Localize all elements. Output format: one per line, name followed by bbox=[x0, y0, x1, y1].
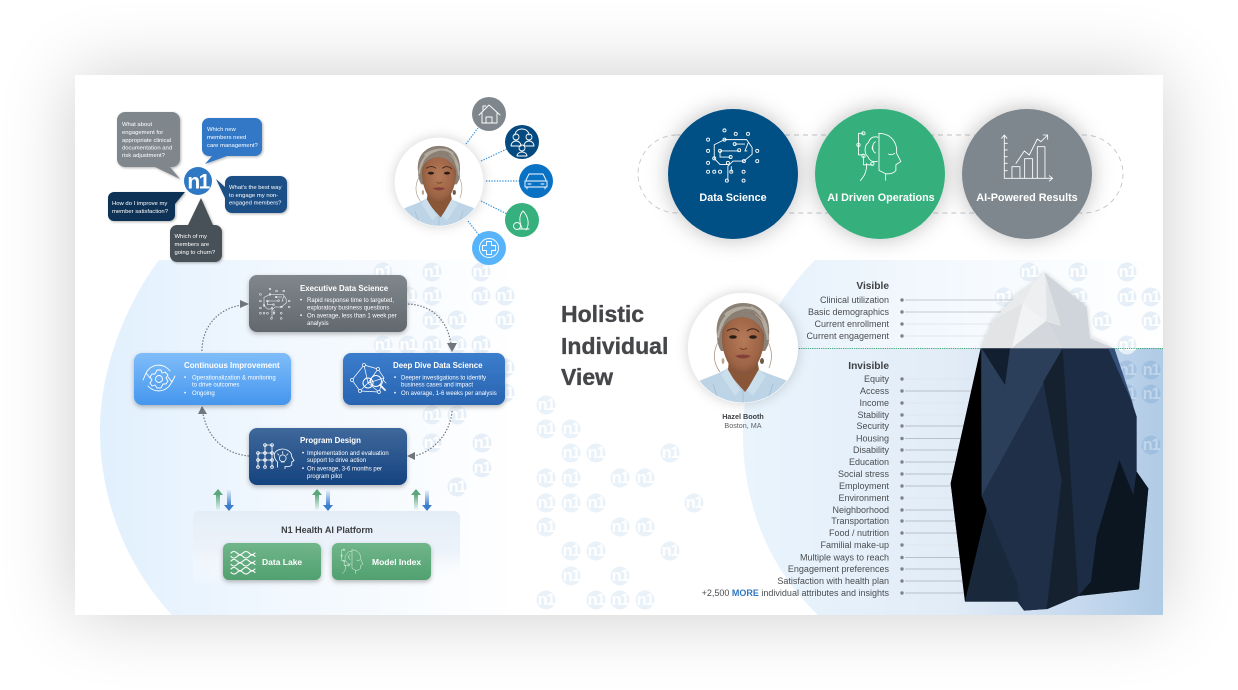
watermark logos: n1 bbox=[424, 287, 441, 305]
pillar: ai driven operations bbox=[815, 109, 945, 239]
watermark logos: n1 bbox=[563, 542, 580, 560]
watermark logos: n1 bbox=[497, 311, 514, 329]
right panel background: circle above the waterline bbox=[758, 260, 1163, 348]
invisible attributes list: Neighborhood bbox=[832, 505, 889, 515]
watermark logos: n1 bbox=[1070, 288, 1087, 306]
watermark logos: n1 bbox=[588, 494, 605, 512]
watermark logos: n1 bbox=[1094, 312, 1111, 330]
bubble: churn bbox=[170, 198, 222, 262]
watermark logos: n1 bbox=[612, 469, 629, 487]
card: deep dive data science: On average, 1-6 weeks per analysis bbox=[401, 391, 497, 397]
watermark logos: n1 bbox=[637, 591, 654, 609]
watermark logos: n1 bbox=[538, 518, 555, 536]
pillar: ai-powered results: AI-Powered Results bbox=[976, 192, 1078, 204]
invisible attributes list: Environment bbox=[838, 493, 889, 503]
bubble: clinical documentation: What about bbox=[122, 122, 152, 128]
large portrait: hazel booth bbox=[688, 293, 798, 430]
visible attributes list: Current engagement bbox=[806, 331, 889, 341]
n1 health ai platform panel: N1 Health AI Platform bbox=[281, 525, 373, 535]
bubble: member satisfaction bbox=[108, 192, 185, 221]
card: deep dive data science: business cases and impact bbox=[401, 382, 473, 388]
card: deep dive data science: • bbox=[394, 391, 396, 397]
bubble: new members: care management? bbox=[207, 143, 258, 149]
watermark logos: n1 bbox=[563, 494, 580, 512]
watermark logos: n1 bbox=[1070, 263, 1087, 281]
iceberg bbox=[951, 273, 1148, 611]
icon: growth chart bbox=[1002, 135, 1053, 181]
watermark logos bbox=[374, 262, 1160, 610]
watermark logos: n1 bbox=[424, 336, 441, 354]
invisible attributes list: Transportation bbox=[831, 516, 889, 526]
watermark logos: n1 bbox=[686, 494, 703, 512]
bubble: clinical documentation: risk adjustment? bbox=[122, 153, 166, 159]
iceberg tip bbox=[981, 273, 1114, 348]
watermark logos: n1 bbox=[497, 287, 514, 305]
card: deep dive data science: Deeper investigations to identify bbox=[401, 376, 486, 382]
card: executive data science bbox=[249, 275, 407, 332]
bubble: new members bbox=[202, 118, 262, 164]
left panel background: light blue circle bbox=[100, 260, 520, 615]
watermark logos: n1 bbox=[473, 263, 490, 281]
invisible attributes list: Education bbox=[849, 457, 889, 467]
watermark logos: n1 bbox=[662, 444, 679, 462]
card: deep dive data science bbox=[343, 353, 505, 405]
watermark logos: n1 bbox=[473, 287, 490, 305]
watermark logos: n1 bbox=[563, 420, 580, 438]
card: program design: On average, 3-6 months per bbox=[307, 466, 382, 472]
watermark logos: n1 bbox=[375, 263, 392, 281]
watermark logos: n1 bbox=[612, 591, 629, 609]
watermark logos: n1 bbox=[538, 591, 555, 609]
invisible attributes list: Food / nutrition bbox=[829, 528, 889, 538]
bubble: churn: Which of my bbox=[174, 234, 207, 240]
card: executive data science: • bbox=[300, 298, 302, 304]
card: executive data science: On average, less than 1 week per bbox=[307, 314, 397, 320]
watermark logos: n1 bbox=[424, 311, 441, 329]
pillar: ai-powered results bbox=[962, 109, 1092, 239]
invisible attributes list: Invisible bbox=[848, 361, 889, 372]
title: holistic individual view: Holistic bbox=[561, 301, 644, 327]
title: holistic individual view bbox=[561, 301, 668, 390]
dotted connectors bbox=[466, 128, 520, 235]
watermark logos: n1 bbox=[996, 288, 1013, 306]
watermark logos: n1 bbox=[662, 542, 679, 560]
invisible attributes list: Stability bbox=[857, 410, 889, 420]
watermark logos: n1 bbox=[637, 518, 654, 536]
pillar: ai driven operations: AI Driven Operations bbox=[827, 192, 935, 204]
card: model index: Model Index bbox=[372, 557, 421, 567]
card: continuous improvement bbox=[134, 353, 291, 405]
watermark logos: n1 bbox=[424, 263, 441, 281]
bubble: new members: Which new bbox=[207, 127, 237, 133]
card: program design: Program Design bbox=[300, 436, 361, 445]
watermark logos: n1 bbox=[1021, 263, 1038, 281]
pillar: data science: Data Science bbox=[699, 192, 767, 204]
dashed pill outline bbox=[638, 135, 1123, 213]
card: continuous improvement: • bbox=[184, 376, 186, 382]
right panel background: circle below the waterline bbox=[743, 348, 1163, 615]
card: deep dive data science: Deep Dive Data Science bbox=[393, 361, 483, 370]
watermark logos: n1 bbox=[563, 469, 580, 487]
watermark logos: n1 bbox=[588, 542, 605, 560]
card: executive data science: Executive Data Science bbox=[300, 284, 389, 293]
iceberg body bbox=[951, 348, 1148, 611]
card: program design: • bbox=[302, 466, 304, 472]
invisible attributes list: Housing bbox=[856, 434, 889, 444]
card: program design: Implementation and evaluation bbox=[307, 451, 389, 457]
invisible attributes list bbox=[702, 361, 904, 598]
card: executive data science: analysis bbox=[307, 321, 329, 327]
speech bubble cluster around n1 logo bbox=[108, 112, 287, 262]
bubble: member satisfaction: How do I improve my bbox=[112, 201, 167, 207]
icon: people bbox=[505, 125, 539, 159]
watermark logos: n1 bbox=[538, 494, 555, 512]
watermark logos: n1 bbox=[1143, 361, 1160, 379]
watermark logos: n1 bbox=[1119, 288, 1136, 306]
card: data lake: Data Lake bbox=[262, 557, 302, 567]
watermark logos: n1 bbox=[375, 336, 392, 354]
title: holistic individual view: Individual bbox=[561, 333, 668, 359]
watermark logos: n1 bbox=[400, 287, 417, 305]
bubble: clinical documentation bbox=[117, 112, 180, 179]
hazel portrait hub with life-factor nodes bbox=[395, 97, 553, 265]
watermark logos: n1 bbox=[497, 384, 514, 402]
watermark logos: n1 bbox=[538, 396, 555, 414]
portrait bbox=[395, 138, 483, 230]
visible attributes list: Clinical utilization bbox=[820, 295, 889, 305]
card: deep dive data science: • bbox=[394, 376, 396, 382]
watermark logos: n1 bbox=[538, 420, 555, 438]
card: executive data science: Rapid response time to targeted, bbox=[307, 298, 394, 304]
leader lines to iceberg bbox=[905, 300, 1013, 593]
card: continuous improvement: to drive outcomes bbox=[192, 382, 239, 388]
invisible attributes list: Equity bbox=[864, 374, 889, 384]
watermark logos: n1 bbox=[1119, 336, 1136, 354]
watermark logos: n1 bbox=[1119, 263, 1136, 281]
invisible attributes list: Multiple ways to reach bbox=[800, 552, 889, 562]
icon: circuit brain bbox=[260, 288, 290, 319]
card: program design: support to drive action bbox=[307, 458, 366, 464]
watermark logos: n1 bbox=[637, 469, 654, 487]
watermark logos: n1 bbox=[612, 567, 629, 585]
large portrait: hazel booth: Boston, MA bbox=[724, 421, 762, 430]
watermark logos: n1 bbox=[449, 478, 466, 496]
icon: circuit grid and head with bulb bbox=[257, 444, 294, 469]
card: data lake bbox=[223, 543, 321, 580]
watermark logos: n1 bbox=[588, 591, 605, 609]
n1 logo: n1 bbox=[187, 170, 211, 194]
invisible attributes list: Access bbox=[860, 386, 889, 396]
bubble: clinical documentation: engagement for bbox=[122, 130, 163, 136]
watermark logos: n1 bbox=[473, 336, 490, 354]
card: continuous improvement: Continuous Improvement bbox=[184, 361, 280, 370]
invisible attributes list: Familial make-up bbox=[820, 540, 889, 550]
invisible attributes list: +2,500 MORE individual attributes and insights bbox=[702, 588, 890, 598]
watermark logos: n1 bbox=[1119, 385, 1136, 403]
bubble: clinical documentation: documentation and bbox=[122, 146, 172, 152]
icon: ai head bbox=[341, 549, 363, 574]
watermark logos: n1 bbox=[449, 406, 466, 424]
card: program design bbox=[249, 428, 407, 485]
bubble: churn: going to churn? bbox=[174, 250, 216, 256]
three pillars band bbox=[638, 109, 1123, 239]
bubble: best way to engage: engaged members? bbox=[229, 200, 282, 206]
bubble: best way to engage: What's the best way bbox=[229, 185, 282, 191]
bubble: best way to engage: to engage my non- bbox=[229, 193, 278, 199]
watermark logos: n1 bbox=[1143, 385, 1160, 403]
card: continuous improvement: Ongoing bbox=[192, 391, 215, 397]
card: executive data science: • bbox=[300, 314, 302, 320]
invisible attributes list: Social stress bbox=[838, 469, 889, 479]
watermark logos: n1 bbox=[1119, 361, 1136, 379]
watermark logos: n1 bbox=[612, 518, 629, 536]
visible attributes list: Current enrollment bbox=[814, 319, 889, 329]
bubble: churn: members are bbox=[174, 242, 210, 248]
pillar: data science bbox=[668, 109, 798, 239]
watermark logos: n1 bbox=[424, 434, 441, 452]
watermark logos: n1 bbox=[563, 444, 580, 462]
icon: home bbox=[472, 97, 506, 131]
watermark logos: n1 bbox=[449, 311, 466, 329]
watermark logos: n1 bbox=[400, 336, 417, 354]
invisible attributes list: Employment bbox=[839, 481, 889, 491]
cycle arrows bbox=[198, 300, 457, 460]
card: program design: • bbox=[302, 451, 304, 457]
card: program design: program pilot bbox=[307, 474, 342, 480]
n1 health ai platform panel bbox=[193, 511, 460, 586]
invisible attributes list: Income bbox=[859, 398, 889, 408]
invisible attributes list: Security bbox=[856, 421, 889, 431]
card: continuous improvement: Operationalization & monitoring bbox=[192, 376, 276, 382]
watermark logos: n1 bbox=[1143, 436, 1160, 454]
watermark logos: n1 bbox=[1143, 288, 1160, 306]
title: holistic individual view: View bbox=[561, 364, 613, 390]
watermark logos: n1 bbox=[538, 469, 555, 487]
invisible attributes list: Disability bbox=[853, 445, 889, 455]
n1 logo bbox=[184, 167, 212, 195]
large portrait: hazel booth: Hazel Booth bbox=[722, 412, 764, 421]
icon: network magnifier bbox=[350, 364, 386, 394]
bubble: best way to engage bbox=[216, 176, 287, 213]
bubble: member satisfaction: member satisfaction? bbox=[112, 209, 169, 215]
icon: food bbox=[505, 203, 539, 237]
visible attributes list: Visible bbox=[856, 281, 889, 292]
invisible attributes list: Engagement preferences bbox=[788, 564, 889, 574]
watermark logos: n1 bbox=[474, 434, 491, 452]
icon: medical plus bbox=[472, 231, 506, 265]
icon: car bbox=[519, 164, 553, 198]
icon: gear cycle bbox=[143, 365, 175, 391]
invisible attributes list: Satisfaction with health plan bbox=[777, 576, 889, 586]
watermark logos: n1 bbox=[563, 567, 580, 585]
watermark logos: n1 bbox=[1143, 312, 1160, 330]
watermark logos: n1 bbox=[497, 359, 514, 377]
watermark logos: n1 bbox=[424, 406, 441, 424]
exchange arrows between program design and platform bbox=[213, 489, 432, 511]
icon: data lake mesh bbox=[231, 552, 255, 574]
watermark logos: n1 bbox=[474, 459, 491, 477]
visible attributes list: Basic demographics bbox=[808, 307, 889, 317]
waterline bbox=[799, 348, 1163, 350]
card: model index bbox=[332, 543, 431, 580]
card: executive data science: exploratory business questions bbox=[307, 306, 389, 312]
watermark logos: n1 bbox=[449, 336, 466, 354]
card: continuous improvement: • bbox=[184, 391, 186, 397]
bubble: new members: members need bbox=[207, 135, 246, 141]
watermark logos: n1 bbox=[588, 444, 605, 462]
visible attributes list bbox=[806, 281, 904, 341]
bubble: clinical documentation: appropriate clinical bbox=[122, 138, 171, 144]
